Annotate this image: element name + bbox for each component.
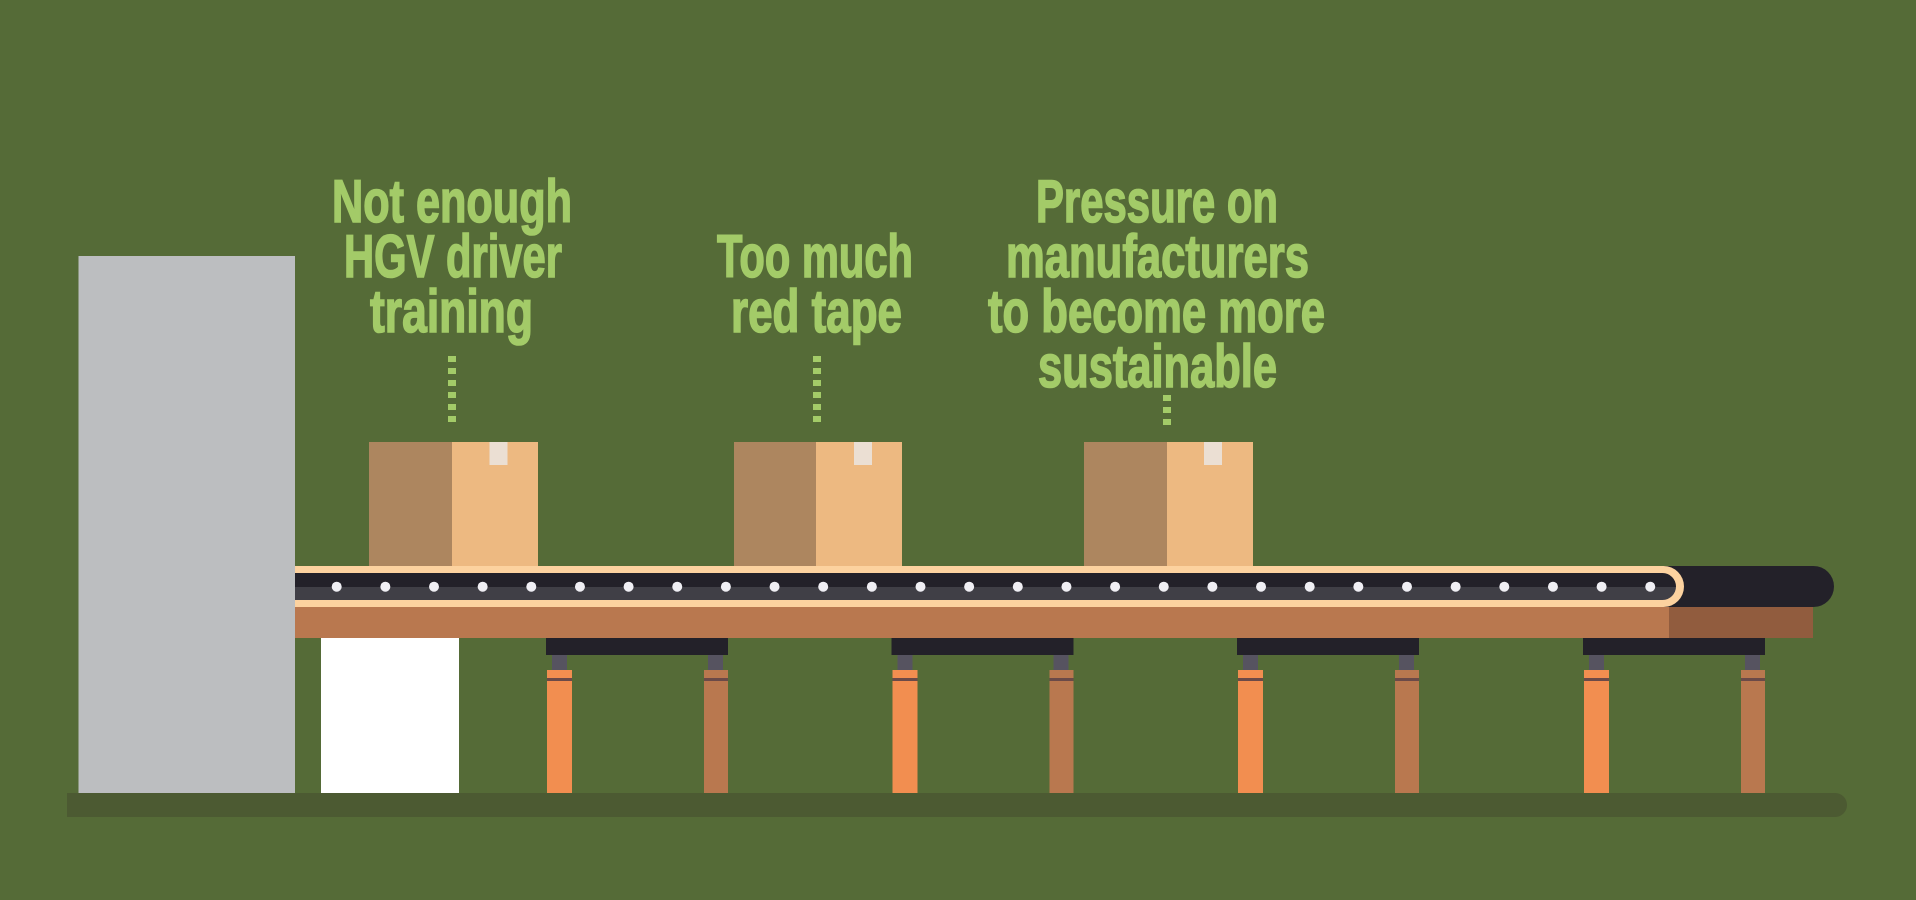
heading: pressure on manufacturers: to become more — [988, 278, 1325, 345]
table support 4 — [1583, 638, 1765, 793]
ground strip — [67, 793, 1847, 817]
table support 1 — [546, 638, 728, 793]
grey machine block — [78, 256, 295, 793]
dotted connector 2 — [813, 356, 821, 422]
heading: pressure on manufacturers: Pressure on — [1036, 168, 1278, 235]
heading: not enough HGV driver training: HGV driver — [344, 223, 562, 290]
cardboard box 1 — [369, 442, 538, 566]
cardboard box 3 — [1084, 442, 1253, 566]
heading: pressure on manufacturers: manufacturers — [1006, 223, 1309, 290]
dotted connector 1 — [448, 356, 456, 422]
white block — [321, 638, 459, 793]
heading: too much red tape: Too much — [717, 223, 913, 290]
wooden conveyor base — [295, 607, 1813, 638]
heading: too much red tape: red tape — [731, 278, 902, 345]
black belt end — [1640, 566, 1834, 607]
table support 2 — [892, 638, 1074, 793]
conveyor belt — [200, 566, 1684, 607]
heading: pressure on manufacturers — [988, 168, 1325, 400]
heading: not enough HGV driver training: training — [370, 278, 533, 345]
table support 3 — [1237, 638, 1419, 793]
cardboard box 2 — [734, 442, 902, 566]
heading: not enough HGV driver training — [332, 168, 572, 345]
heading: too much red tape — [717, 223, 913, 345]
belt rollers — [332, 582, 1655, 592]
dotted connector 3 — [1163, 395, 1171, 425]
heading: not enough HGV driver training: Not enough — [332, 168, 572, 235]
heading: pressure on manufacturers: sustainable — [1038, 333, 1277, 400]
